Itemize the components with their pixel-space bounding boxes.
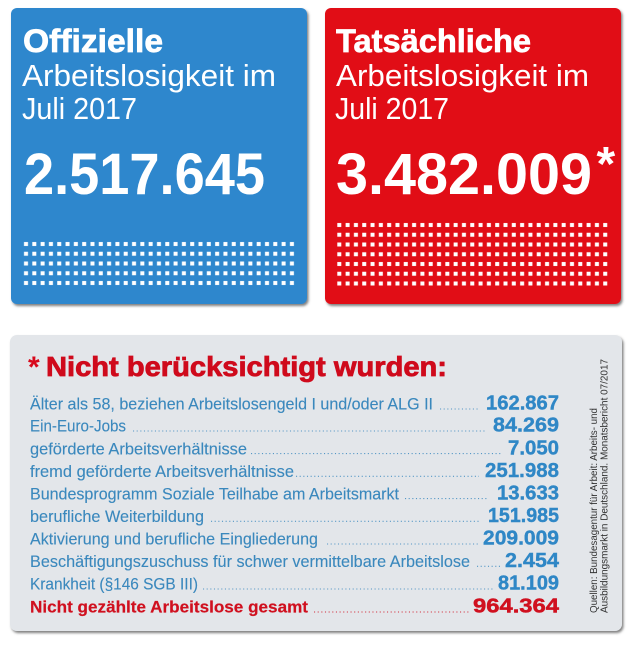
- row 6: berufliche Weiterbildung: [30, 508, 204, 526]
- row 6: 151.985: [488, 504, 559, 527]
- row 1: Älter als 58, beziehen Arbeitslosengeld I und/oder ALG II: [30, 396, 433, 414]
- row 4: [30, 459, 559, 482]
- row 4: fremd geförderte Arbeitsverhältnisse: [30, 463, 294, 481]
- row 4: 251.988: [485, 459, 559, 482]
- row 9: 81.109: [498, 572, 559, 595]
- heading: Nicht berücksichtigt wurden:: [46, 351, 447, 382]
- subheading line 1: Arbeitslosigkeit im: [22, 58, 276, 93]
- row 7: 209.009: [483, 527, 559, 550]
- red card background: [325, 8, 621, 304]
- row 3: 7.050: [508, 436, 559, 459]
- subheading line 2: Juli 2017: [335, 91, 449, 126]
- panel: not counted: [10, 335, 622, 631]
- official figure: 2.517.645: [24, 142, 265, 207]
- row 7: Aktivierung und berufliche Eingliederung: [30, 531, 318, 549]
- subheading line 2: Juli 2017: [22, 91, 137, 126]
- row 10: total: Nicht gezählte Arbeitslose gesamt: [30, 599, 309, 617]
- row 9: [30, 572, 559, 595]
- row 1: 162.867: [486, 392, 559, 415]
- blue card background: [11, 8, 307, 304]
- row 1: [30, 392, 559, 415]
- row 8: [30, 549, 560, 572]
- source note: Quellen: Bundesagentur für Arbeit: Arbeits- und: [588, 408, 600, 613]
- row 2: Ein-Euro-Jobs: [30, 418, 126, 436]
- asterisk: *: [596, 138, 616, 191]
- row 3: [30, 436, 559, 459]
- row 5: 13.633: [497, 481, 559, 504]
- source note: [588, 359, 610, 613]
- row 5: [30, 481, 559, 504]
- row 8: 2.454: [505, 549, 560, 572]
- panel: official unemployment: [11, 8, 307, 304]
- row 8: Beschäftigungszuschuss für schwer vermittelbare Arbeitslose: [30, 553, 470, 571]
- grey card background: [10, 335, 622, 631]
- dot matrix: [335, 220, 609, 288]
- row 7: [30, 527, 559, 550]
- row 6: [30, 504, 559, 527]
- row 10: total: [30, 595, 560, 618]
- dot matrix: [22, 239, 296, 288]
- actual figure: 3.482.009: [336, 142, 592, 207]
- row 3: geförderte Arbeitsverhältnisse: [30, 440, 247, 458]
- source note: Ausbildungsmarkt in Deutschland. Monatsbericht 07/2017: [598, 359, 610, 613]
- subheading line 1: Arbeitslosigkeit im: [336, 58, 589, 93]
- row 2: 84.269: [493, 414, 559, 437]
- heading: Offizielle: Offizielle: [23, 23, 163, 59]
- panel: actual unemployment: [325, 8, 621, 304]
- row 2: [30, 414, 559, 437]
- row 10: total: 964.364: [473, 595, 560, 618]
- row 5: Bundesprogramm Soziale Teilhabe am Arbeitsmarkt: [30, 485, 399, 503]
- row 9: Krankheit (§146 SGB III): [30, 576, 198, 594]
- heading: Tatsächliche: Tatsächliche: [336, 23, 531, 59]
- heading asterisk: *: [28, 351, 40, 384]
